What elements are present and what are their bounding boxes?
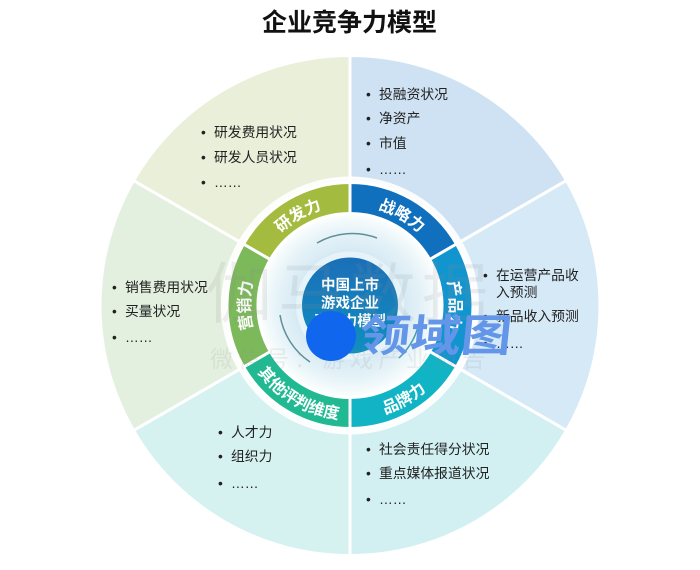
panel: inner disc (260, 216, 440, 396)
panel: right sector (350, 180, 600, 430)
list: 其他评判维度: …… (231, 476, 259, 491)
center circle (302, 258, 398, 354)
label: 品牌力: 品牌力 (383, 383, 425, 416)
list: 战略力: • (366, 111, 371, 126)
list: 营销力 (112, 280, 208, 345)
list: 产品力: 新品收入预测 (496, 309, 579, 324)
list: 研发力: 研发费用状况 (214, 125, 297, 140)
list: 研发力: • (201, 125, 206, 140)
label: 研发力: 研发力 (273, 199, 320, 232)
panel: top right sector (350, 56, 566, 306)
list: 战略力: 投融资状况 (379, 87, 448, 102)
list: 品牌力: 重点媒体报道状况 (379, 466, 490, 481)
title: 企业竞争力模型 (262, 9, 437, 37)
list: 研发力: • (201, 175, 206, 190)
list: 战略力: …… (379, 162, 407, 177)
center text: 中国上市 (321, 276, 379, 294)
label: 其他评判维度: 其他评判维度 (258, 366, 340, 420)
list: 营销力: 买量状况 (125, 304, 180, 319)
list: 营销力: • (112, 330, 117, 345)
ring segment: 研发力 (244, 182, 350, 260)
list: 产品力: • (483, 336, 488, 351)
list: 产品力: 入预测 (496, 285, 537, 300)
list: 其他评判维度: 组织力 (231, 449, 272, 464)
logo watermark (306, 311, 514, 361)
center circle: 竞争力模型 (314, 312, 386, 330)
decorative arcs (280, 233, 420, 362)
list: 品牌力: • (366, 442, 371, 457)
list: 品牌力 (366, 441, 490, 507)
list: 其他评判维度: • (218, 476, 223, 491)
list: 研发力: …… (214, 175, 242, 190)
list: 品牌力: • (366, 466, 371, 481)
list: 品牌力: • (366, 492, 371, 507)
list: 产品力 (483, 268, 579, 351)
ring labels (236, 198, 463, 420)
list: 产品力: • (483, 309, 488, 324)
sector lists (112, 87, 579, 507)
watermark: 微信号：游戏产业报告 (210, 346, 490, 372)
watermark: 伽马数据 (206, 257, 494, 331)
logo text: 领域图 (357, 312, 514, 361)
panel: bottom right sector (350, 306, 566, 556)
panel: left sector (100, 180, 350, 430)
list: 营销力: …… (125, 330, 153, 345)
ring segment: 其他评判维度 (244, 352, 350, 428)
list: 战略力: • (366, 87, 371, 102)
list: 战略力: 市值 (379, 135, 407, 151)
watermark (206, 257, 494, 372)
white ring behind segments (221, 176, 479, 434)
center circle: 游戏企业 (321, 294, 379, 312)
panel: top left sector (134, 56, 350, 306)
list: 战略力: 净资产 (379, 111, 420, 126)
list: 战略力 (366, 87, 448, 177)
ring segment: 品牌力 (350, 352, 456, 428)
label: 战略力: 战略力 (378, 198, 425, 232)
panel: bottom left sector (134, 306, 350, 556)
list: 其他评判维度: • (218, 425, 223, 440)
list: 战略力: • (366, 162, 371, 177)
list: 品牌力: …… (379, 492, 407, 507)
list: 品牌力: 社会责任得分状况 (379, 441, 490, 457)
list: 其他评判维度 (218, 425, 272, 491)
list: 营销力: 销售费用状况 (125, 280, 208, 295)
list: 研发力 (201, 125, 297, 190)
list: 产品力: • (483, 268, 488, 283)
label: 营销力: 营销力 (236, 281, 254, 330)
list: 其他评判维度: 人才力 (231, 425, 272, 440)
list: 营销力: • (112, 304, 117, 319)
list: 研发力: 研发人员状况 (214, 150, 297, 165)
list: 营销力: • (112, 280, 117, 295)
ring segment: 产品力 (430, 244, 473, 367)
list: 研发力: • (201, 150, 206, 165)
ring segment: 营销力 (227, 244, 270, 367)
ring segment: 战略力 (350, 182, 456, 260)
label: 产品力: 产品力 (446, 281, 463, 329)
list: 战略力: • (366, 136, 371, 151)
list: 产品力: 在运营产品收 (496, 268, 579, 283)
logo icon (306, 311, 356, 361)
list: 其他评判维度: • (218, 449, 223, 464)
panel: ring segments (227, 182, 473, 428)
list: 产品力: …… (496, 336, 524, 351)
panel: outer sectors (100, 56, 600, 556)
